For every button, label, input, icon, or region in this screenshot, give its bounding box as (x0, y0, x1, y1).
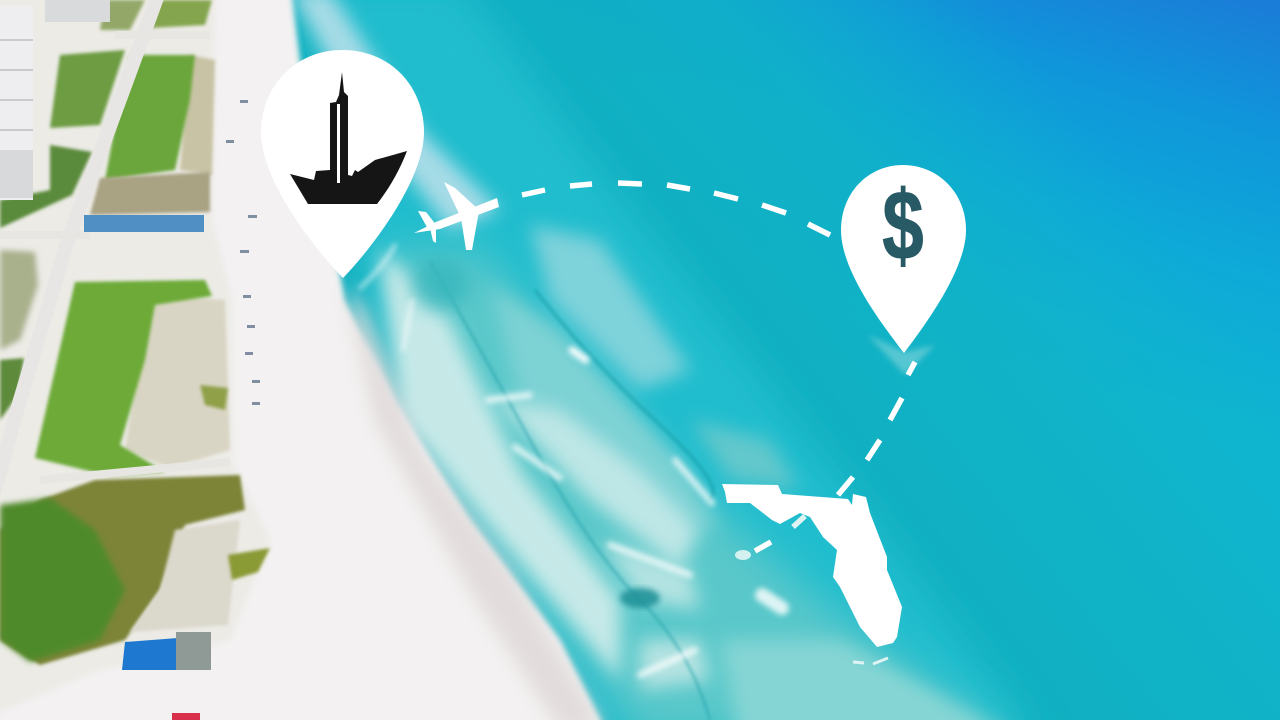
beach umbrellas (226, 100, 260, 405)
road (0, 0, 158, 500)
Florida keys (853, 658, 888, 664)
map pin: skyline (261, 50, 424, 278)
pin shadow on water (868, 335, 935, 375)
high-rise building (0, 5, 33, 200)
map pin: dollar (841, 165, 966, 353)
icon: dollar sign: $ (882, 171, 924, 280)
icon: skyscraper and sail skyline (290, 72, 407, 204)
vegetation patches (0, 0, 270, 665)
shallow surf water (290, 0, 1040, 720)
Florida silhouette (722, 484, 902, 647)
foam lines (360, 245, 782, 675)
white sand beach (0, 0, 610, 720)
beach structures (45, 0, 211, 720)
airplane icon (414, 182, 499, 250)
dashed route (522, 183, 915, 560)
coastal land strip (0, 0, 270, 720)
